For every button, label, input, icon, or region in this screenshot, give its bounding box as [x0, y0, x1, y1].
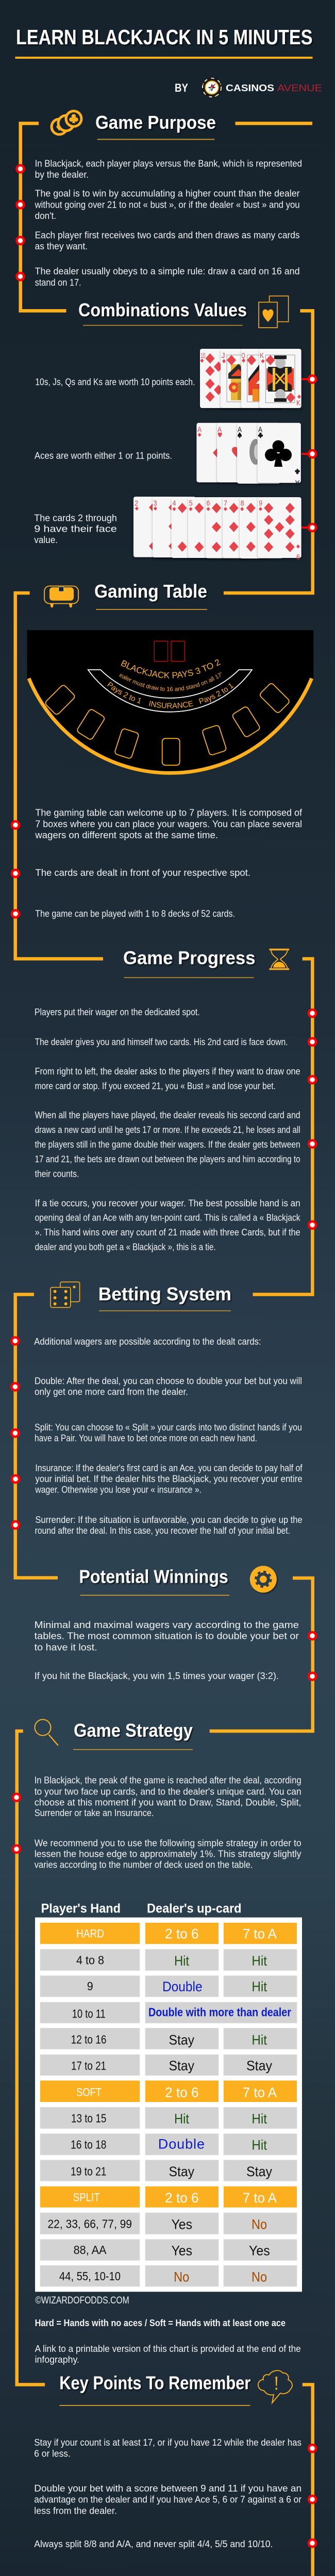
table section: soft: Hit	[174, 2111, 189, 2127]
icon: hourglass	[269, 948, 289, 970]
bullet text: tie and blackjack	[35, 1197, 316, 1252]
table legend: Hard = Hands with no aces / Soft = Hands with at least one ace	[35, 2317, 286, 2328]
table section: split: 22, 33, 66, 77, 99	[47, 2217, 132, 2230]
table section: hard: Hit	[174, 1953, 189, 1969]
bullet text: draw or stop: more card or stop. If you exceed 21, you « Bust » and lose your bet.	[35, 1080, 276, 1091]
table section: split: SPLIT	[73, 2191, 100, 2204]
bullet text: draw or stop	[35, 1066, 316, 1091]
icon: speech cloud with exclamation	[258, 2370, 292, 2403]
byline: casinos avenue logo: CASINOS	[226, 82, 274, 93]
panel: key points to remember	[34, 2370, 316, 2576]
icon: magnifier	[35, 1720, 58, 1745]
hand: two through nine of diamonds: 9	[296, 552, 300, 561]
bullet text: surrender	[12, 1514, 303, 1536]
icon: gear	[250, 1566, 277, 1592]
hand: two through nine of diamonds: 8	[240, 499, 244, 508]
hand: two through nine of diamonds: 9	[259, 499, 262, 508]
bullet text: seven players: 7 boxes where you can place your wagers. You can place several	[35, 818, 302, 829]
table section: hard: Stay	[169, 2058, 194, 2073]
table section: hard: 17 to 21	[71, 2059, 106, 2072]
bullet text: tie and blackjack: ». This hand wins over any count of 21 made with three Cards, but if the	[35, 1227, 300, 1238]
icon: dice	[51, 1282, 80, 1308]
text: tens and faces: 10s, Js, Qs and Ks are worth 10 points each.	[35, 377, 195, 387]
table section: soft: Stay	[246, 2164, 272, 2179]
bullet text: blackjack payout: If you hit the Blackjack, you win 1,5 times your wager (3:2).	[35, 1670, 279, 1681]
bullet text: decks: The game can be played with 1 to 8 decks of 52 cards.	[35, 908, 235, 919]
table section: soft: Double	[158, 2137, 205, 2152]
heading: gaming table: Gaming Table	[94, 581, 207, 602]
bullet text: dealer rule: stand on 17.	[35, 277, 81, 287]
text: two through nine: 9 have their face	[34, 523, 117, 534]
panel: game progress	[35, 947, 316, 1252]
byline: casinos avenue logo: BY	[175, 81, 188, 94]
table section: soft: 19 to 21	[71, 2164, 106, 2178]
bullet text: insurance: your initial bet. If the dealer hits the Blackjack, you recover your entire	[35, 1473, 303, 1484]
bullet text: stay	[34, 2437, 316, 2459]
table section: hard: 10 to 11	[72, 2007, 106, 2021]
table section: split: 44, 55, 10-10	[59, 2269, 121, 2283]
table section: hard: 9	[87, 1979, 93, 1993]
table header labels: Dealer's up-card	[147, 1902, 241, 1916]
bullet text: dealer rule: The dealer usually obeys to a simple rule: draw a card on 16 and	[35, 266, 300, 277]
bullet text: bank	[16, 158, 302, 180]
bullet text: cards received	[16, 230, 300, 251]
table section: soft: 2 to 6	[165, 2085, 199, 2100]
bullet text: wager limits: Minimal and maximal wagers vary according to the game	[35, 1619, 299, 1630]
hand: ten jack queen king of diamonds: J	[222, 351, 225, 360]
bullet text: wager limits: to have it lost.	[35, 1641, 97, 1652]
bullet text: deal: The dealer gives you and himself two cards. His 2nd card is face down.	[35, 1036, 288, 1047]
curved table text: Pays 2 to 1	[107, 682, 141, 704]
bullet text: wager limits: tables. The most common situation is to double your bet or	[35, 1631, 299, 1641]
table section: split: No	[252, 2217, 267, 2232]
table section: hard: 2 to 6	[165, 1926, 199, 1942]
table section: split: No	[252, 2269, 267, 2284]
connector dot: two through nine	[301, 524, 316, 531]
bullet text: draw or stop: From right to left, the dealer asks to the players if they want to draw one	[35, 1066, 300, 1077]
table section: soft: 7 to A	[243, 2085, 277, 2100]
hand: two through nine of diamonds: 6	[206, 499, 210, 508]
byline: casinos avenue logo: AVENUE	[277, 82, 322, 93]
bullet text: wager	[35, 1007, 316, 1018]
bullet text: stay: 6 or less.	[34, 2448, 71, 2459]
curved table text	[107, 659, 234, 708]
text: printable link note	[35, 2343, 301, 2365]
bullet text: goal: without going over 21 to not « bust », or if the dealer « bust » and you	[35, 199, 300, 210]
curved table text: BLACKJACK PAYS 3 TO 2	[121, 659, 221, 679]
bullet text: seven players	[12, 807, 303, 840]
icon: table	[44, 586, 78, 607]
bullet text: double	[11, 1376, 302, 1397]
bullet text: recommendation: We recommend you to use the following simple strategy in order to	[35, 1837, 301, 1848]
table section: split: Yes	[249, 2243, 270, 2258]
bullet text: double: Double: After the deal, you can choose to double your bet but you will	[35, 1376, 302, 1386]
bullet text: insurance: wager. Otherwise you lose your « insurance ».	[35, 1484, 202, 1495]
table header labels: Player's Hand	[41, 1902, 121, 1916]
bullet text: goal	[16, 188, 300, 221]
table section: split: Yes	[171, 2243, 192, 2258]
bullet text: stay: Stay if your count is at least 17, or if you have 12 while the dealer has	[34, 2437, 301, 2448]
bullet text: recommendation	[13, 1837, 301, 1870]
heading: betting system: Betting System	[98, 1283, 231, 1304]
bullet text: seven players: The gaming table can welcome up to 7 players. It is composed of	[35, 807, 303, 818]
panel: betting system	[11, 1282, 303, 1536]
hand: ten jack queen king of diamonds	[200, 349, 301, 408]
byline: casinos avenue logo	[175, 77, 322, 98]
hand: two through nine of diamonds	[133, 497, 301, 561]
player betting boxes	[44, 683, 290, 765]
table header labels	[41, 1902, 241, 1916]
text: printable link note: A link to a printable version of this chart is provided at the end of the	[35, 2343, 301, 2354]
bullet text: double your bet: Double your bet with a score between 9 and 11 if you have an	[34, 2483, 301, 2494]
bullet text: cards dealt: The cards are dealt in front of your respective spot.	[35, 867, 250, 878]
table section: soft: Hit	[252, 2138, 267, 2153]
table section: split: 88, AA	[74, 2243, 107, 2257]
hand: ten jack queen king of diamonds: 10	[201, 351, 205, 360]
table section: soft: Stay	[169, 2164, 194, 2179]
bullet text: dealer rule	[16, 266, 300, 287]
bullet text: double your bet: less from the dealer.	[34, 2505, 117, 2516]
panel: game purpose	[16, 110, 302, 287]
bullet text: dealer reveals	[35, 1110, 316, 1179]
bullet text: peak of the game: In Blackjack, the peak of the game is reached after the deal, according	[35, 1775, 301, 1786]
bullet text: wager: Players put their wager on the dedicated spot.	[35, 1007, 200, 1018]
hand: four aces: A	[295, 478, 299, 487]
insurance band	[88, 670, 252, 712]
table section: hard: 4 to 8	[76, 1953, 104, 1967]
table section: hard	[40, 1923, 297, 2075]
bullet text: split: Split: You can choose to « Split » your cards into two distinct hands if you	[35, 1422, 302, 1433]
text: two through nine	[34, 513, 117, 545]
bullet text: peak of the game	[13, 1775, 301, 1818]
bullet text: cards received: as they want.	[35, 241, 88, 251]
table section: hard: HARD	[76, 1927, 104, 1940]
hand: two through nine of diamonds: 3	[154, 499, 157, 508]
panel: game strategy	[13, 1720, 302, 2365]
bullet text: bank: In Blackjack, each player plays versus the Bank, which is represented	[35, 158, 302, 168]
panel: gaming table	[10, 581, 313, 919]
bullet text: seven players: wagers on different spots at the same time.	[35, 829, 218, 840]
dealer card slots	[154, 641, 185, 662]
bullet text: split	[11, 1422, 302, 1444]
bullet text: cards received: Each player first receives two cards and then draws as many cards	[35, 230, 300, 241]
table section: hard: Hit	[252, 2032, 267, 2047]
bullet text: double your bet	[34, 2483, 316, 2516]
text: aces: Aces are worth either 1 or 11 points.	[35, 450, 172, 461]
source credit: ©WIZARDOFODDS.COM	[35, 2295, 129, 2306]
hand: ten jack queen king of diamonds: K	[260, 351, 264, 360]
icon: casino chips	[51, 110, 82, 136]
hand: four aces: A	[217, 425, 222, 434]
table section: split: 7 to A	[243, 2190, 277, 2206]
hand: four aces: A	[238, 425, 242, 434]
table section: split	[40, 2187, 297, 2286]
panel: combinations values	[34, 296, 316, 561]
curved table text: Dealer must draw to 16 and stand on all 17's	[120, 672, 222, 691]
title	[15, 25, 312, 59]
bullet text: recommendation: varies according to the number of deck used on the table.	[35, 1859, 253, 1870]
text: two through nine: value.	[34, 534, 58, 545]
chart: blackjack table diagram	[27, 630, 313, 775]
bullet text: tie and blackjack: dealer and you both get a « Blackjack », this is a tie.	[35, 1241, 216, 1252]
text: two through nine: The cards 2 through	[34, 513, 117, 523]
table section: soft: 16 to 18	[71, 2138, 106, 2151]
table section: hard: Hit	[252, 1953, 267, 1969]
bullet text: surrender: Surrender: If the situation is unfavorable, you can decide to give up the	[35, 1514, 303, 1525]
table section: hard: Stay	[169, 2032, 194, 2047]
hand: two through nine of diamonds: 5	[189, 499, 193, 508]
bullet text: peak of the game: Surrender or take an Insurance.	[35, 1807, 154, 1818]
hand: four aces	[196, 423, 301, 487]
bullet text: tie and blackjack: If a tie occurs, you recover your wager. The best possible hand is an	[35, 1197, 300, 1208]
heading: combinations values: Combinations Values	[78, 299, 247, 320]
heading: game progress: Game Progress	[123, 947, 256, 969]
table section: hard: Stay	[246, 2058, 272, 2073]
heading: game purpose: Game Purpose	[95, 112, 216, 133]
curved table text: INSURANCE	[149, 701, 193, 708]
heading: potential winnings: Potential Winnings	[79, 1566, 228, 1587]
icon: two cards with heart	[259, 296, 289, 328]
bullet text: peak of the game: choose at this moment if you want to Draw, Stand, Double, Split,	[35, 1797, 301, 1807]
hand: two through nine of diamonds: 4	[172, 499, 176, 508]
bullet text: recommendation: lessen the house edge to approximately 1%. This strategy slightly	[35, 1848, 301, 1859]
table section: split: 2 to 6	[165, 2190, 199, 2206]
hand: ten jack queen king of diamonds: Q	[241, 351, 245, 360]
table section: hard: Double	[162, 1979, 203, 1994]
bullet text: additional wagers: Additional wagers are possible according to the dealt cards:	[34, 1336, 261, 1347]
bullet text: goal: don't.	[35, 210, 56, 221]
table section: soft: Hit	[252, 2111, 267, 2127]
bullet text: surrender: round after the deal. In this case, you recover the half of your initial bet.	[35, 1525, 290, 1536]
curved table text: Pays 2 to 1	[199, 683, 234, 704]
bullet text: wager limits	[35, 1619, 316, 1652]
hand: two through nine of diamonds: 7	[224, 499, 227, 508]
hand: ten jack queen king of diamonds: K	[296, 399, 300, 408]
table section: soft: 13 to 15	[71, 2111, 106, 2125]
table section: hard: 7 to A	[243, 1926, 277, 1942]
bullet text: goal: The goal is to win by accumulating a higher count than the dealer	[35, 188, 300, 199]
table section: soft: SOFT	[76, 2086, 102, 2098]
heading: key points: Key Points To Remember	[59, 2372, 250, 2394]
bullet text: double your bet: advantage on the dealer and if you have Ace 5, 6 or 7 against a 6 or	[34, 2494, 301, 2505]
bullet text: bank: by the dealer.	[35, 169, 89, 180]
bullet text: insurance	[12, 1462, 303, 1495]
heading: game strategy: Game Strategy	[74, 1720, 193, 1741]
bullet text: split: have a Pair. You will have to bet once more on each new hand.	[35, 1433, 257, 1444]
table section: hard: 12 to 16	[71, 2033, 106, 2046]
table section: soft	[40, 2080, 297, 2181]
bullet text: always split: Always split 8/8 and A/A, and never split 4/4, 5/5 and 10/10.	[34, 2538, 273, 2549]
bullet text: peak of the game: to your two face up cards, and to the dealer's unique card. You can	[35, 1786, 301, 1797]
strategy table	[35, 1918, 302, 2292]
bullet text: double: only get one more card from the dealer.	[35, 1386, 188, 1397]
table section: hard: Double with more than dealer	[148, 2005, 291, 2019]
table section: split: Yes	[171, 2217, 192, 2232]
panel: potential winnings	[35, 1566, 316, 1681]
bullet text: dealer reveals: their counts.	[35, 1168, 79, 1179]
table section: hard: Hit	[252, 1979, 267, 1994]
connector dot: aces	[301, 450, 316, 457]
table section: split: No	[174, 2269, 189, 2284]
hand: four aces: A	[197, 425, 202, 434]
hand: four aces: A	[258, 425, 262, 434]
hand: two through nine of diamonds: 2	[135, 499, 138, 508]
text: printable link note: infography.	[35, 2354, 79, 2365]
connector dot: tens	[301, 376, 316, 383]
